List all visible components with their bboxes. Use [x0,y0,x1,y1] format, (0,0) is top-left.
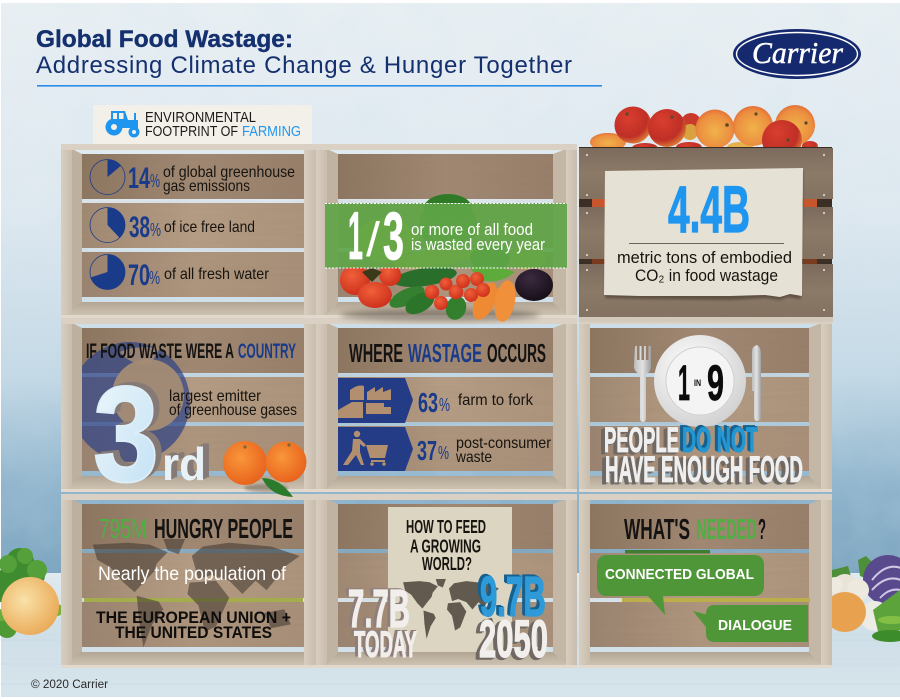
world map [93,539,300,647]
icon: globe behind number [82,342,190,462]
arrow: post-consumer [338,427,413,471]
icon: tractor [106,111,140,138]
stat: 14% greenhouse gas: % [150,171,160,191]
stat: 37% post-consumer waste: post-consumer [456,435,552,452]
panel: 1 in 9 [579,318,832,492]
heading: if food waste were a country: COUNTRY [238,340,296,363]
icon: fork [634,346,651,422]
stat: 14% greenhouse gas: of global greenhouse [163,164,295,181]
question text [406,516,486,574]
panel: how to feed a growing world [316,494,577,669]
stat: 63% farm to fork: % [439,395,450,415]
text: the European Union and the United States [96,609,291,642]
question text: HOW TO FEED [406,516,486,537]
heading: if food waste were a country: IF FOOD WASTE WERE A [86,340,234,363]
banner: 1/3 of all food: / [366,214,381,267]
panel: 1/3 of food wasted [316,144,577,323]
stat: 37% post-consumer waste: % [438,443,449,463]
heading: what's needed: NEEDED [696,514,757,546]
question text: A GROWING [410,536,481,556]
logo: Carrier: Carrier [752,35,844,70]
icon: oranges [223,441,306,497]
title: Addressing Climate Change & Hunger Together [36,52,572,79]
text: largest emitter of greenhouse gases: of greenhouse gases [169,402,297,419]
stat: 14% greenhouse gas [90,160,295,195]
stat: 9.7B 2050 [479,565,548,669]
question text: WORLD? [422,553,472,574]
heading: where wastage occurs: WHERE [349,338,403,368]
text: people do not have enough food: DO NOT [682,421,758,460]
stat: 3rd [93,358,206,510]
heading: 795M hungry people [99,513,293,544]
paper: 4.4B stat: metric tons of embodied [617,248,792,267]
banner: 1/3 of all food: 3 [383,198,404,274]
icon: apples [590,105,818,160]
title: Global Food Wastage: [36,26,293,53]
stat: 7.7B today: 7.7B [348,579,410,639]
vegetables: left side [0,548,63,638]
stat: 38% ice free land: % [150,220,161,240]
heading: where wastage occurs [349,338,546,368]
stat: 63% farm to fork [418,387,534,418]
speech bubble: dialogue [693,605,808,642]
text: people do not have enough food: PEOPLE [604,421,679,460]
panel: what's needed: ? [758,514,766,546]
stat: 9.7B 2050: 9.7B [480,565,546,629]
stat: 70% fresh water [90,254,270,292]
text: largest emitter of greenhouse gases: largest emitter [169,388,262,405]
stat: 70% fresh water: of all fresh water [164,266,270,283]
paper: 4.4B stat [604,168,803,300]
panel: environmental footprint of farming [61,105,316,318]
panel: 795M hungry people [61,494,316,668]
stat: 37% post-consumer waste: 37 [417,435,437,466]
icon: plate with 1 in 9: 1 [678,355,690,411]
stat: 63% farm to fork: 63 [418,387,438,418]
stat: 38% ice free land [90,207,255,244]
text: largest emitter of greenhouse gases [169,388,297,419]
arrow: farm to fork [338,378,413,423]
text: people do not have enough food [604,421,803,490]
panel: apple crate with 4.4B [579,105,833,322]
paper: 4.4B stat: 4.4B [668,172,750,246]
stat: 38% ice free land: 38 [129,211,150,244]
stat: 7.7B today [348,579,417,665]
banner: environmental footprint [93,105,312,144]
stat: 14% greenhouse gas: 14 [128,162,150,195]
logo: Carrier [733,29,861,79]
stat: 37% post-consumer waste: waste [455,449,492,466]
banner: environmental footprint: FOOTPRINT OF [145,123,238,140]
speech bubble: connected global [597,555,764,615]
icon: plate with 1 in 9 [654,335,746,427]
heading: what's needed: WHAT'S [624,514,690,546]
icon: vegetables [340,194,553,323]
banner: 1/3 of all food: is wasted every year [411,235,545,254]
text: nearly the population of: Nearly the population of [98,563,287,585]
paper with world map [388,507,512,652]
heading: 795M hungry people: 795M [99,513,147,544]
stat: 70% fresh water: % [149,268,160,288]
panel: what's needed [579,494,832,668]
vegetables: right side [824,555,900,642]
panel: where wastage occurs [316,318,577,492]
banner: environmental footprint: ENVIRONMENTAL [145,109,256,126]
banner: 1/3 of all food: 1 [348,198,363,274]
icon: plate with 1 in 9: 9 [707,355,724,411]
copyright: © 2020 Carrier [31,679,108,691]
icon: plate with 1 in 9: IN [694,378,701,388]
speech bubble: dialogue: DIALOGUE [718,617,792,634]
heading: where wastage occurs: OCCURS [487,338,546,368]
icon: knife [752,345,761,421]
stat: 14% greenhouse gas: gas emissions [163,178,250,195]
stat: 63% farm to fork: farm to fork [458,392,534,409]
heading: where wastage occurs: WASTAGE [408,338,482,368]
speech bubble: connected global: CONNECTED GLOBAL [605,566,754,583]
banner: environmental footprint: FARMING [242,123,301,140]
heading: 795M hungry people: HUNGRY PEOPLE [154,513,293,544]
text: the European Union and the United States: THE UNITED STATES [115,624,272,642]
stat: 70% fresh water: 70 [128,259,150,292]
banner: 1/3 of all food [325,198,567,274]
stat: 38% ice free land: of ice free land [164,219,255,236]
title [36,26,602,87]
text: the European Union and the United States: THE EUROPEAN UNION + [96,609,291,627]
paper: 4.4B stat: CO₂ in food wastage [635,266,778,285]
stat: 37% post-consumer waste [417,435,552,466]
banner: 1/3 of all food: or more of all food [411,220,533,239]
stat: 3rd: rd [162,438,206,490]
stat: 7.7B today: TODAY [354,624,417,665]
panel: if food waste were a country [61,318,316,510]
stat: 3rd: 3 [93,358,159,510]
stat: 9.7B 2050: 2050 [479,610,548,669]
